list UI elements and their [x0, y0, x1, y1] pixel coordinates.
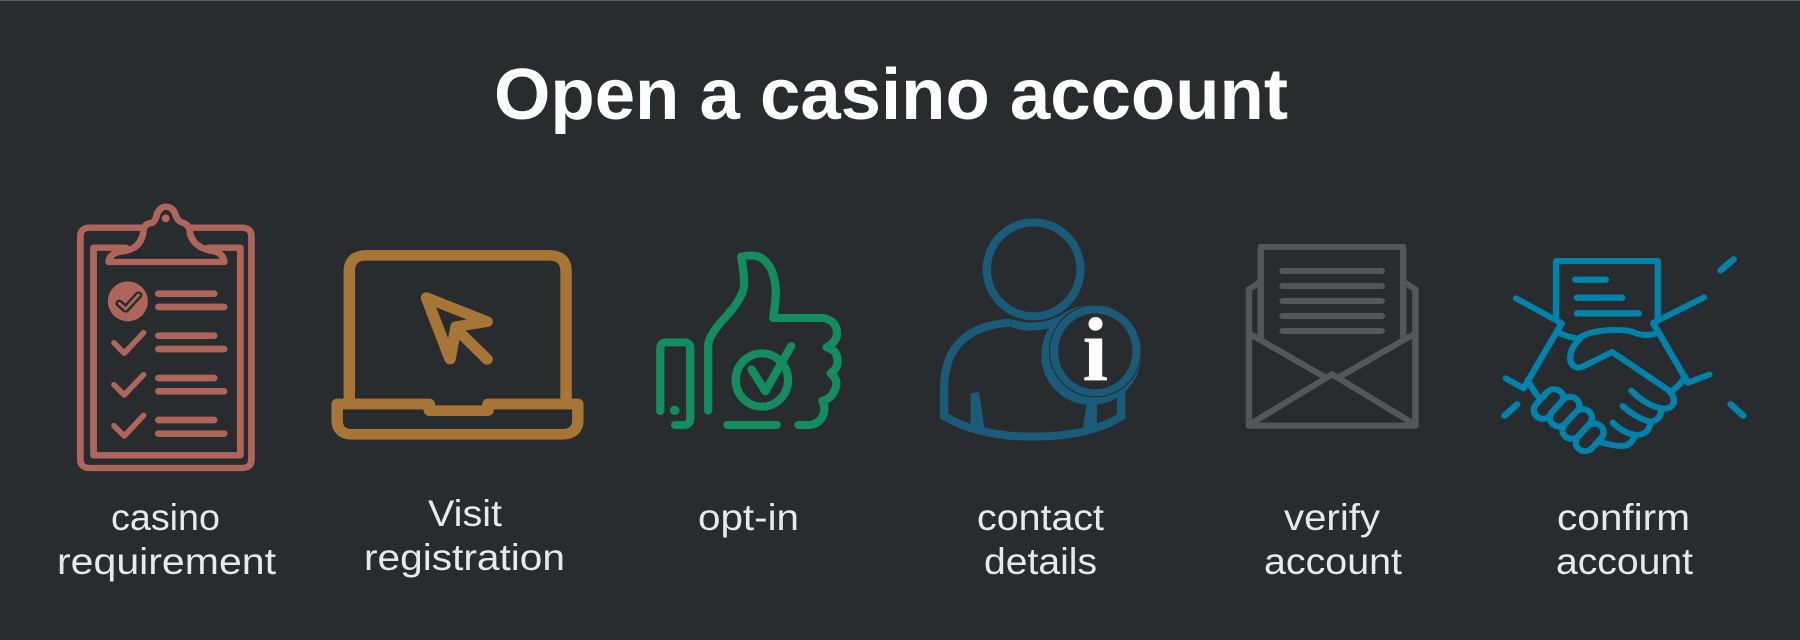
label: opt-in: opt-in: [698, 497, 799, 538]
icon: laptop with cursor: [337, 255, 578, 434]
label: contact details: details: [984, 541, 1097, 582]
label: casino requirement: requirement: [57, 541, 277, 582]
icon: thumbs up with check: [660, 255, 838, 425]
icon: handshake with document: [1505, 259, 1743, 455]
icon: open envelope with letter: [1249, 247, 1415, 426]
icon: clipboard checklist: [80, 207, 251, 468]
label: confirm account: [1556, 497, 1694, 582]
label: verify account: verify: [1284, 497, 1381, 538]
icon: person with info badge: [944, 222, 1141, 437]
label: contact details: contact: [977, 497, 1105, 538]
label: Visit registration: registration: [364, 537, 565, 578]
label: casino requirement: casino: [111, 497, 220, 538]
icon: person with info badge: i: [1082, 300, 1108, 400]
label: verify account: [1264, 497, 1403, 582]
label: casino requirement: [57, 497, 277, 582]
label: Visit registration: [364, 493, 565, 578]
label: confirm account: account: [1556, 541, 1694, 582]
label: Visit registration: Visit: [428, 493, 503, 534]
label: contact details: [977, 497, 1105, 582]
label: confirm account: confirm: [1557, 497, 1690, 538]
label: verify account: account: [1264, 541, 1403, 582]
title: Open a casino account: [494, 55, 1288, 135]
